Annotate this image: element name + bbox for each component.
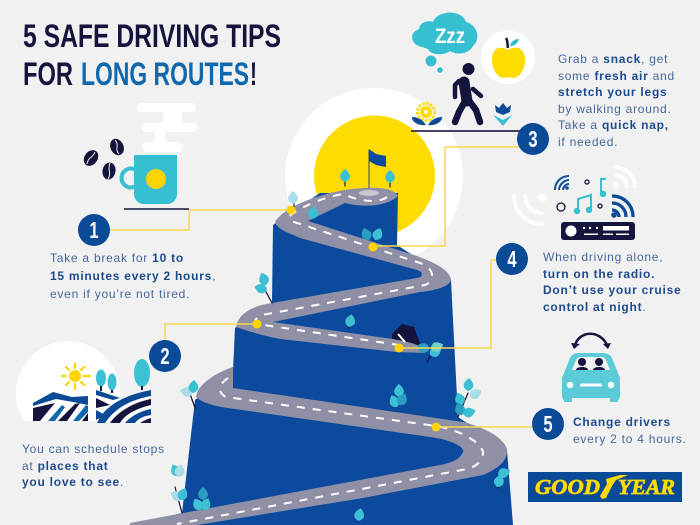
tip 2 text: you love to see: [22, 475, 120, 489]
logo: Goodyear: YEAR: [618, 475, 675, 499]
tip 4 text: .: [642, 300, 646, 314]
tip 1 text: even if you’re not tired.: [50, 287, 190, 301]
tip 4 text: turn on the radio.: [543, 267, 655, 281]
tip 3 text: stretch your legs: [558, 85, 667, 99]
step 1: 1: [89, 218, 99, 244]
step 1: [78, 214, 110, 246]
icon: landscape: [16, 341, 151, 423]
sun: [62, 364, 90, 389]
title: 5 SAFE DRIVING TIPS: [23, 18, 281, 54]
connector lines: [110, 147, 532, 427]
icon: coffee cup and beans: [81, 103, 198, 209]
tip 3 text: Grab a snack, get: [558, 52, 668, 66]
blue wifi small: [555, 176, 569, 190]
title: LONG ROUTES: [81, 56, 249, 92]
icon: apple: [481, 30, 535, 84]
logo: Goodyear: GOOD: [535, 475, 600, 499]
steam: [137, 103, 198, 152]
title: [23, 18, 281, 92]
tip 4 text: control at night: [543, 300, 642, 314]
hills right: [96, 390, 151, 423]
trees and leaves on mountain: [168, 169, 512, 522]
tip 2 text: at: [22, 459, 38, 473]
tip 1 text: ,: [212, 269, 216, 283]
tip 2 text: places that: [38, 459, 109, 473]
mountain with winding road: [130, 149, 513, 525]
road markers: [252, 206, 440, 432]
icon: flower: [412, 104, 442, 125]
tip 5 text: every 2 to 4 hours.: [573, 432, 687, 446]
tip 2 text: You can schedule stops: [22, 442, 165, 456]
trees: [96, 359, 150, 393]
tip 1 text: Take a break for 10 to: [50, 251, 184, 265]
tip 1 text: 15 minutes every 2 hours: [50, 269, 212, 283]
icon: thought cloud: [412, 13, 477, 73]
ground line: [411, 130, 520, 132]
step 5: 5: [543, 412, 553, 438]
logo: Goodyear: [528, 472, 682, 502]
sun behind mountain: [285, 88, 463, 266]
tip 4 text: When driving alone,: [543, 250, 663, 264]
small circles: [557, 180, 602, 211]
road dashes: [177, 194, 483, 524]
icon: tulip: [493, 103, 512, 126]
step 5: [532, 408, 564, 440]
tip 3 text: fresh air and: [594, 69, 675, 83]
tip 4 text: Don’t use your cruise: [543, 283, 681, 297]
mountain body: [130, 193, 513, 525]
icon: car with swap arrow: [562, 334, 620, 402]
tip 3 text: by walking around.: [558, 102, 672, 116]
white signal waves: [514, 167, 635, 224]
step 2: [149, 340, 181, 372]
upper road: [236, 188, 451, 353]
hills left: [33, 392, 88, 406]
icon: walking person: [455, 63, 481, 122]
tip 3 text: if needed.: [558, 135, 618, 149]
icon: thought cloud: Zzz: [435, 25, 465, 48]
icon: radio and music: [514, 167, 635, 240]
tip 5 text: Change drivers: [573, 415, 671, 429]
tip 2 text: .: [120, 475, 124, 489]
summit platform: [359, 190, 379, 196]
tip 3 text: some: [558, 69, 594, 83]
step 3: 3: [528, 127, 538, 153]
title: FOR: [23, 56, 73, 92]
lower road: [130, 367, 507, 525]
music notes: [578, 179, 606, 211]
blue wifi large: [612, 196, 633, 217]
title: !: [250, 56, 257, 92]
radio: [561, 222, 635, 240]
flag: [369, 149, 386, 188]
tip 3 text: quick nap,: [602, 118, 669, 132]
tip 3 text: Take a: [558, 118, 602, 132]
step 4: 4: [507, 247, 517, 273]
step 4: [496, 243, 528, 275]
step 3: [517, 123, 549, 155]
step 2: 2: [160, 344, 170, 370]
tunnel: [392, 324, 421, 346]
